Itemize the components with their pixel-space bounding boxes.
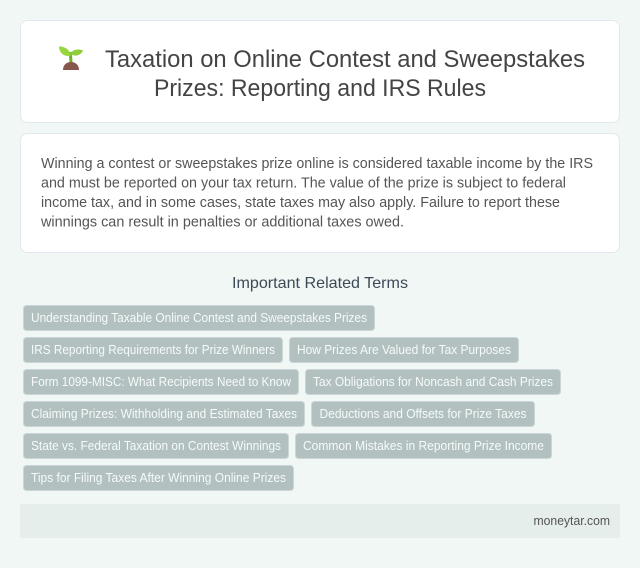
title line 2: Prizes: Reporting and IRS Rules (154, 75, 486, 102)
chip (24, 466, 294, 490)
chip (24, 338, 282, 362)
icon: seedling (59, 46, 83, 70)
chip: Understanding Taxable Online Contest and Sweepstakes Prizes (31, 310, 367, 325)
chip: Tips for Filing Taxes After Winning Online Prizes (31, 470, 286, 485)
chip: How Prizes Are Valued for Tax Purposes (297, 342, 511, 357)
description line 2: and must be reported on your tax return. The value of the prize is subject to federal (41, 174, 566, 192)
chip: State vs. Federal Taxation on Contest Winnings (31, 438, 281, 453)
description line 4: winnings can result in penalties or additional taxes owed. (40, 214, 404, 230)
chip (24, 434, 288, 458)
chip (290, 338, 518, 362)
chip: Claiming Prizes: Withholding and Estimated Taxes (31, 406, 297, 421)
description line 1: Winning a contest or sweepstakes prize online is considered taxable income by the IRS (41, 155, 593, 172)
footer (20, 504, 620, 538)
panel: title card (20, 20, 620, 122)
chip: Common Mistakes in Reporting Prize Income (303, 438, 544, 453)
panel: description (20, 134, 620, 252)
chip: Tax Obligations for Noncash and Cash Prizes (313, 374, 553, 389)
chip: Deductions and Offsets for Prize Taxes (320, 406, 527, 421)
term chips (24, 306, 560, 490)
chip (306, 370, 560, 394)
chip (24, 306, 374, 330)
heading: important related terms: Important Related Terms (232, 275, 408, 292)
chip (312, 402, 534, 426)
title line 1: Taxation on Online Contest and Sweepstakes (105, 46, 585, 73)
chip: IRS Reporting Requirements for Prize Winners (31, 342, 275, 357)
chip (24, 402, 304, 426)
chip (24, 370, 298, 394)
chip (296, 434, 552, 458)
chip: Form 1099-MISC: What Recipients Need to Know (31, 374, 292, 389)
description line 3: income tax, and in some cases, state taxes may also apply. Failure to report these (41, 194, 560, 211)
footer source: moneytar.com (534, 514, 610, 528)
